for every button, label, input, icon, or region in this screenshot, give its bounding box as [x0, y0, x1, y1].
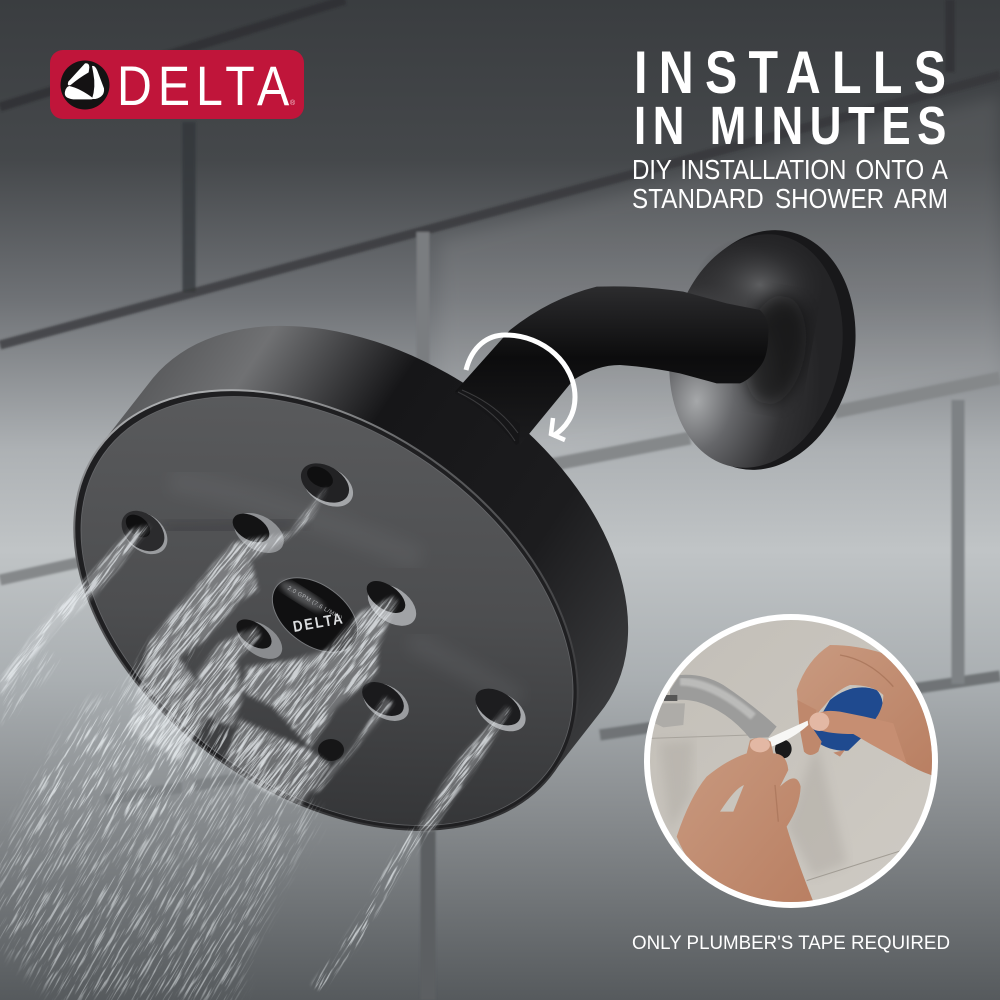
water jets: [0, 487, 512, 833]
blue tape roll: [812, 687, 883, 751]
center Delta badge: [259, 563, 371, 667]
right hand: [797, 645, 933, 776]
shower arm: [455, 286, 769, 445]
Delta logo badge: [50, 50, 304, 119]
Delta logo badge: ®: [290, 99, 296, 107]
water spray droplets: [0, 637, 432, 1000]
wall tile edge lines: [650, 735, 903, 881]
shower head body: [0, 299, 660, 921]
thumbnail: [809, 712, 829, 731]
left hand: [677, 738, 814, 903]
logo wordmark: DELTA: [117, 56, 290, 118]
subheading text: STANDARD SHOWER ARM: [632, 185, 948, 214]
subheading text: [632, 156, 949, 214]
silver shower arm: [655, 675, 792, 758]
subheading text: DIY INSTALLATION ONTO A: [632, 156, 949, 185]
shower wall flange: [648, 213, 877, 487]
shower head face: [0, 299, 660, 921]
inset photo: applying plumber's tape: [640, 610, 950, 910]
spray nozzles: [114, 455, 533, 761]
caption: only plumber's tape required: ONLY PLUMBER'S TAPE REQUIRED: [632, 932, 950, 954]
heading: installs in minutes: [634, 38, 946, 156]
heading: installs in minutes: IN MINUTES: [634, 97, 946, 156]
rotation arrow: [466, 335, 575, 440]
center Delta badge: 2.0 GPM (7.6 L/MIN): [286, 586, 343, 622]
heading: installs in minutes: INSTALLS: [634, 38, 946, 106]
center Delta badge: DELTA: [292, 611, 344, 636]
icon: Delta triangle emblem: [60, 60, 110, 110]
